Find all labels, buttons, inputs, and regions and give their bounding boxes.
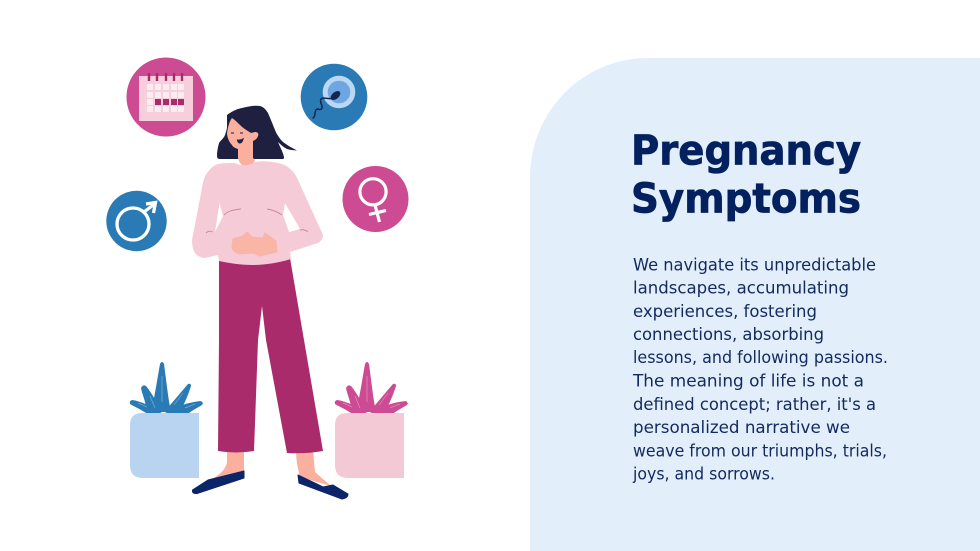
body text: defined concept; rather, it's a xyxy=(633,395,876,414)
face and neck xyxy=(227,118,258,166)
plant: pink potted plant xyxy=(335,362,408,478)
pot: blue xyxy=(130,413,199,478)
trousers xyxy=(218,258,323,453)
icon: calendar badge xyxy=(126,58,206,136)
body text: connections, absorbing xyxy=(633,325,824,344)
pot: pink xyxy=(335,413,404,478)
body text: personalized narrative we xyxy=(633,418,850,437)
body text: landscapes, accumulating xyxy=(633,278,849,298)
body text: joys, and sorrows. xyxy=(632,464,775,484)
body text: lessons, and following passions. xyxy=(633,348,888,367)
hair xyxy=(217,106,297,159)
title: Symptoms xyxy=(631,174,861,222)
body text: weave from our triumphs, trials, xyxy=(633,442,887,460)
icon: female symbol badge xyxy=(342,166,408,232)
right foot xyxy=(296,450,331,486)
left shoe xyxy=(192,471,244,494)
left foot xyxy=(210,450,244,480)
title: Pregnancy xyxy=(631,126,861,174)
right shoe xyxy=(298,475,348,499)
title xyxy=(631,126,861,222)
gaps between arms and torso xyxy=(215,203,300,232)
panel: text background xyxy=(530,58,980,551)
icon: sperm and egg badge xyxy=(301,64,367,130)
belly creases xyxy=(206,209,308,233)
hands xyxy=(232,232,277,256)
body text: We navigate its unpredictable xyxy=(633,256,876,274)
plant: blue potted plant xyxy=(130,362,203,478)
facial features xyxy=(231,133,243,143)
body text: experiences, fostering xyxy=(633,302,817,321)
figure: pregnant woman xyxy=(192,106,348,499)
body text: The meaning of life is not a xyxy=(632,372,864,390)
sweater xyxy=(192,161,323,265)
icon: male symbol badge xyxy=(106,191,167,251)
body text xyxy=(632,256,888,484)
